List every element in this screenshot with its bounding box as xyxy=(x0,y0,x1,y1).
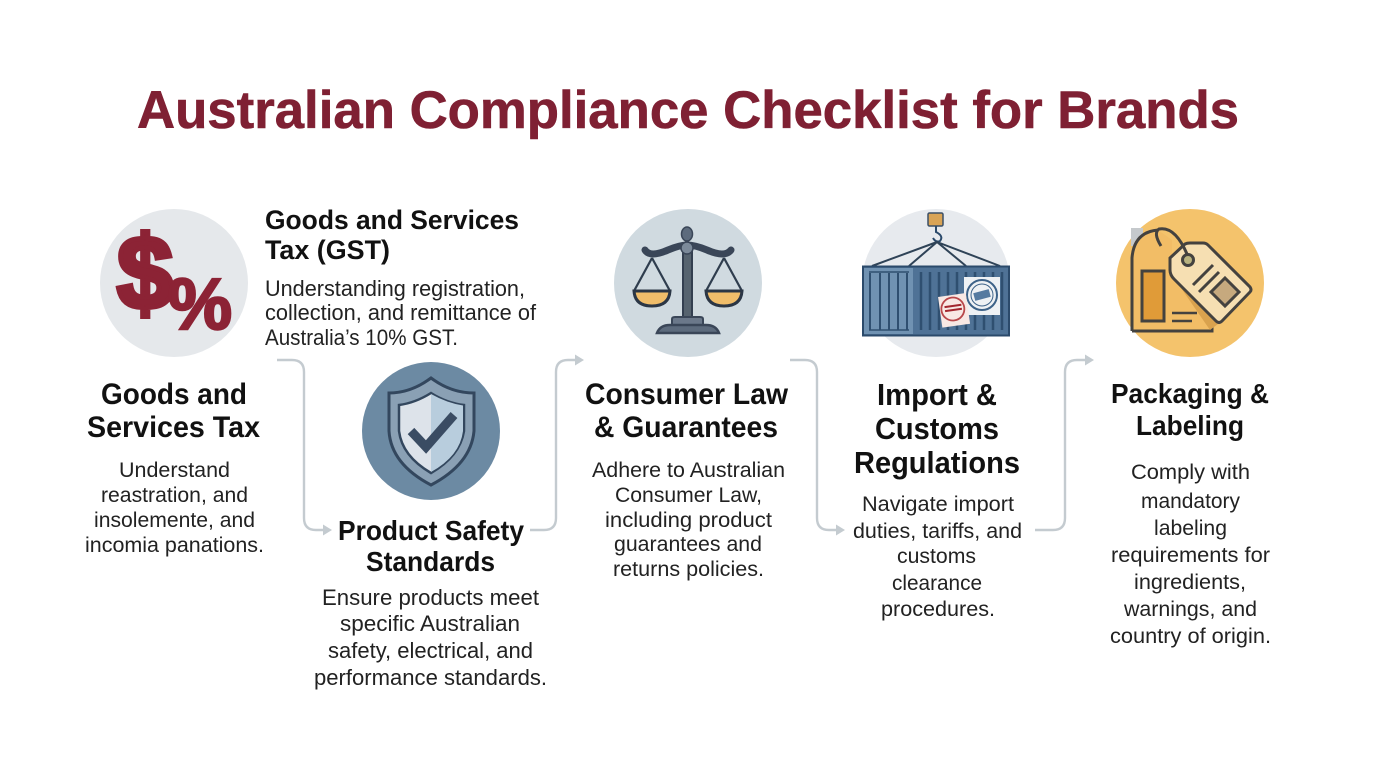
panel: goods and services tax xyxy=(85,209,264,557)
icon: dollar and percent: % xyxy=(168,265,232,345)
text: import description: duties, tariffs, and xyxy=(853,520,1022,543)
heading: goods and services tax (GST): Tax (GST) xyxy=(265,235,390,265)
text: consumer law description: returns policies. xyxy=(613,558,764,581)
text: import description: clearance xyxy=(892,572,982,595)
heading: import and customs regulations: Import & xyxy=(877,377,997,412)
text: product safety description: Ensure products meet xyxy=(322,585,539,610)
text: packaging description: country of origin. xyxy=(1110,625,1271,648)
icon: balance scales xyxy=(614,209,762,357)
icon: shipping container on crane hook xyxy=(862,209,1010,357)
panel: packaging and labeling xyxy=(1110,209,1271,648)
text: GST description: Australia’s 10% GST. xyxy=(265,325,458,350)
text: packaging description: warnings, and xyxy=(1123,598,1257,621)
heading: goods and services tax: Goods and xyxy=(101,378,247,411)
text: GST description: Understanding registration, xyxy=(265,276,525,301)
text: packaging description: requirements for xyxy=(1111,544,1270,567)
text: goods and services tax description xyxy=(85,459,264,557)
text: product safety description: specific Australian xyxy=(340,611,520,636)
text: packaging description xyxy=(1110,461,1271,648)
text: goods and services tax description: incomia panations. xyxy=(85,534,264,557)
arrow: product safety to consumer law xyxy=(530,354,584,530)
heading: product safety standards: Product Safety xyxy=(338,515,524,546)
icon: blue customs stamp xyxy=(964,277,1000,315)
arrow: consumer law to import xyxy=(790,360,845,536)
text: product safety description xyxy=(314,585,547,690)
text: product safety description: safety, electrical, and xyxy=(328,638,533,663)
text: packaging description: Comply with xyxy=(1131,461,1250,484)
panel: import and customs regulations xyxy=(853,209,1022,621)
text: GST description: collection, and remittance of xyxy=(265,300,537,325)
heading: packaging and labeling: Labeling xyxy=(1136,410,1244,441)
icon: product tags xyxy=(1116,209,1264,357)
icon: shield with check mark xyxy=(362,362,500,500)
text: consumer law description xyxy=(592,459,785,581)
text: packaging description: mandatory xyxy=(1141,490,1240,513)
heading: goods and services tax: Services Tax xyxy=(87,411,260,444)
panel: GST detail xyxy=(265,205,537,350)
text: goods and services tax description: Understand xyxy=(119,459,230,482)
panel: consumer law and guarantees xyxy=(585,209,789,581)
text: consumer law description: Adhere to Australian xyxy=(592,459,785,482)
text: import description: Navigate import xyxy=(862,493,1014,516)
text: import description: procedures. xyxy=(881,598,995,621)
text: consumer law description: Consumer Law, xyxy=(615,484,762,507)
text: goods and services tax description: insolemente, and xyxy=(94,509,255,532)
text: product safety description: performance standards. xyxy=(314,665,547,690)
text: import description xyxy=(853,493,1022,621)
text: packaging description: labeling xyxy=(1154,517,1227,540)
title: Australian Compliance Checklist for Brands xyxy=(137,81,1239,140)
heading: product safety standards xyxy=(338,515,524,577)
text: GST description xyxy=(265,276,537,350)
icon: red customs stamp xyxy=(938,293,970,328)
heading: packaging and labeling: Packaging & xyxy=(1111,378,1269,409)
panel: product safety standards xyxy=(314,362,547,690)
heading: consumer law and guarantees: Consumer Law xyxy=(585,378,789,411)
icon: dollar and percent: $ xyxy=(117,216,173,332)
text: import description: customs xyxy=(897,545,976,568)
heading: goods and services tax (GST): Goods and Services xyxy=(265,205,519,235)
heading: consumer law and guarantees xyxy=(585,378,789,444)
heading: packaging and labeling xyxy=(1111,378,1269,441)
heading: goods and services tax (GST) xyxy=(265,205,519,265)
icon: dollar and percent xyxy=(100,209,248,357)
text: consumer law description: including product xyxy=(605,509,772,532)
text: goods and services tax description: reastration, and xyxy=(101,484,248,507)
arrow: GST to product safety xyxy=(277,360,332,536)
arrow: import to packaging xyxy=(1035,354,1094,530)
text: consumer law description: guarantees and xyxy=(614,533,762,556)
heading: import and customs regulations: Customs xyxy=(875,411,999,446)
heading: product safety standards: Standards xyxy=(366,546,495,577)
heading: consumer law and guarantees: & Guarantees xyxy=(594,411,778,444)
text: packaging description: ingredients, xyxy=(1134,571,1246,594)
heading: import and customs regulations: Regulations xyxy=(854,445,1020,480)
heading: goods and services tax xyxy=(87,378,260,444)
heading: import and customs regulations xyxy=(854,377,1020,480)
